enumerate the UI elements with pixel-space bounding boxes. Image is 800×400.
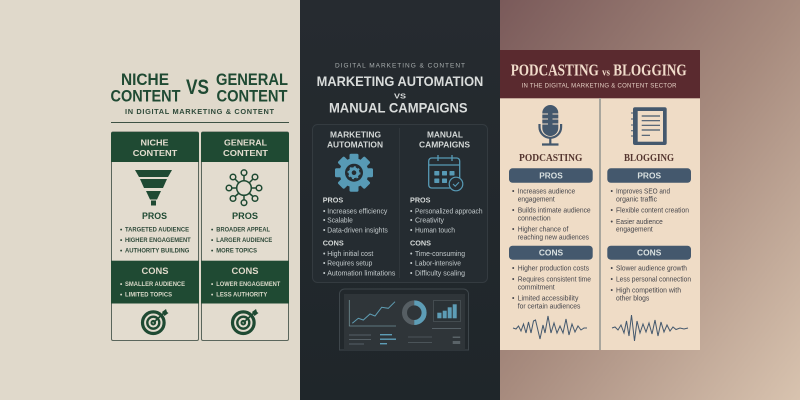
pros list: engagement <box>616 227 653 234</box>
pros list: Flexible content creation <box>616 208 689 215</box>
pros list: • <box>512 188 515 195</box>
pros <box>211 211 273 254</box>
waveform <box>513 316 587 339</box>
pros list: Builds intimate audience <box>518 208 591 215</box>
cons list: • <box>610 266 614 273</box>
title: niche vs general content: CONTENT <box>216 87 288 106</box>
header band <box>500 50 700 98</box>
icon: target <box>232 309 258 334</box>
icon: target <box>142 309 168 334</box>
pros label: PROS <box>539 172 563 180</box>
pros list: • <box>512 208 515 215</box>
cons list: other blogs <box>616 296 650 303</box>
cons: • <box>211 291 214 298</box>
column heading: PODCASTING <box>519 152 583 164</box>
cons list <box>610 266 691 303</box>
table placeholder lines <box>349 328 461 344</box>
pros: • <box>323 218 326 225</box>
cons: Time-consuming <box>415 251 465 258</box>
title: niche vs general content: CONTENT <box>110 87 181 106</box>
pros list: reaching new audiences <box>518 234 589 242</box>
cons label <box>607 246 691 260</box>
pros list <box>512 188 591 242</box>
pros list <box>610 188 689 234</box>
column: general content <box>201 132 289 340</box>
cons label: CONS <box>637 249 662 258</box>
cons: CONS <box>142 266 168 276</box>
column: podcasting <box>509 105 593 339</box>
cons label <box>509 246 593 260</box>
cons list: Less personal connection <box>616 277 691 284</box>
pros list: Improves SEO and <box>616 188 670 195</box>
card body <box>500 98 700 350</box>
title: VS <box>394 91 406 100</box>
cons: SMALLER AUDIENCE <box>125 281 186 288</box>
pros list: organic traffic <box>616 197 657 204</box>
pros list: Increases audience <box>518 188 575 195</box>
cons <box>111 261 199 304</box>
pros list: connection <box>518 216 551 223</box>
pros list: Higher chance of <box>518 227 568 234</box>
cons list: • <box>512 277 515 284</box>
pros: MORE TOPICS <box>216 247 258 254</box>
column: niche content <box>111 132 199 340</box>
pros label: PROS <box>637 172 662 180</box>
cons: • <box>323 271 326 278</box>
pros: • <box>120 227 123 234</box>
pros list: • <box>512 227 515 234</box>
cons list: Slower audience growth <box>616 266 687 273</box>
pros: PROS <box>232 211 258 221</box>
pros: Scalable <box>327 218 353 225</box>
title: MARKETING AUTOMATION <box>317 73 483 89</box>
column header: CONTENT <box>133 149 177 158</box>
column heading: AUTOMATION <box>327 140 383 150</box>
column header: GENERAL <box>224 139 267 148</box>
icon: microphone <box>540 105 561 144</box>
cons list: Limited accessibility <box>518 296 579 303</box>
pros <box>120 211 191 254</box>
pros label <box>509 168 593 183</box>
column header: CONTENT <box>223 149 268 158</box>
pros: • <box>211 227 214 234</box>
pros: Creativity <box>415 218 444 225</box>
column heading: MANUAL <box>427 130 463 140</box>
title: MANUAL CAMPAIGNS <box>329 99 468 115</box>
column heading <box>327 130 383 150</box>
cons: CONS <box>232 266 258 276</box>
pros list: • <box>610 208 614 215</box>
panel: podcasting vs blogging <box>500 0 800 400</box>
column header: NICHE <box>140 139 169 148</box>
pros: • <box>410 208 413 215</box>
column: manual campaigns <box>410 130 483 278</box>
pros: • <box>120 247 123 254</box>
cons: • <box>323 251 326 258</box>
column: blogging <box>607 107 691 341</box>
cons <box>323 239 396 278</box>
title: PODCASTING vs BLOGGING <box>511 61 687 80</box>
cons: LIMITED TOPICS <box>125 291 173 298</box>
pros: • <box>410 228 413 235</box>
panel: marketing automation vs manual campaigns <box>300 0 500 400</box>
subtitle: IN THE DIGITAL MARKETING & CONTENT SECTOR <box>522 84 677 90</box>
column heading: BLOGGING <box>624 152 674 164</box>
pros: • <box>211 237 214 244</box>
cons: LESS AUTHORITY <box>216 291 268 298</box>
bar chart <box>434 300 460 322</box>
title <box>317 73 483 115</box>
icon: network hub <box>226 170 262 206</box>
icon: gear <box>335 154 373 192</box>
cons: CONS <box>323 239 344 248</box>
column header <box>111 132 199 162</box>
cons: Labor-intensive <box>415 261 461 268</box>
title: niche vs general content: VS <box>186 76 209 99</box>
pros: Data-driven insights <box>327 228 388 235</box>
pros label <box>607 168 691 183</box>
cons list: Requires consistent time <box>518 277 591 284</box>
column heading <box>419 130 470 150</box>
column heading: CAMPAIGNS <box>419 140 470 150</box>
pros: PROS <box>323 196 343 205</box>
cons <box>410 239 465 278</box>
cons: • <box>120 281 123 288</box>
pros list: Easier audience <box>616 219 663 226</box>
cons list: • <box>512 296 515 303</box>
pros: PROS <box>410 196 430 205</box>
pros: • <box>120 237 123 244</box>
cons: LOWER ENGAGEMENT <box>216 281 280 288</box>
cons list: for certain audiences <box>518 304 581 311</box>
cons: High initial cost <box>327 251 373 258</box>
title: niche vs general content <box>110 70 288 106</box>
cons: • <box>410 271 413 278</box>
pros: • <box>323 208 326 215</box>
pros: TARGETED AUDIENCE <box>125 227 190 234</box>
cons list: commitment <box>518 285 555 292</box>
cons list: High competition with <box>616 288 681 295</box>
divider <box>599 98 601 350</box>
cons list: • <box>610 277 614 284</box>
pros: PROS <box>142 211 167 221</box>
pros: • <box>323 228 326 235</box>
title: niche vs general content: NICHE <box>121 70 169 89</box>
waveform <box>612 315 688 341</box>
eyebrow: DIGITAL MARKETING & CONTENT <box>335 62 465 69</box>
cons list: Higher production costs <box>518 266 589 273</box>
pros list: • <box>610 219 614 226</box>
pros <box>323 196 388 235</box>
pros <box>410 196 483 235</box>
cons: Difficulty scaling <box>415 271 465 278</box>
pros: • <box>211 247 214 254</box>
cons: • <box>120 291 123 298</box>
cons: • <box>410 261 413 268</box>
cons list: • <box>512 266 515 273</box>
cons: Automation limitations <box>327 271 396 278</box>
cons: • <box>211 281 214 288</box>
comparison card <box>312 124 488 282</box>
cons: Requires setup <box>327 261 372 268</box>
panel: niche vs general content <box>0 0 300 400</box>
subtitle: IN DIGITAL MARKETING & CONTENT <box>125 107 274 116</box>
pros list: engagement <box>518 197 555 204</box>
column header <box>201 132 289 162</box>
column heading: MARKETING <box>330 130 381 140</box>
cons list <box>512 266 591 311</box>
pros: HIGHER ENGAGEMENT <box>125 237 191 244</box>
pros: BROADER APPEAL <box>216 227 270 234</box>
cons list: • <box>610 288 614 295</box>
cons <box>201 261 289 304</box>
pros list: • <box>610 188 614 195</box>
title: niche vs general content: GENERAL <box>216 70 288 89</box>
pros: Personalized approach <box>415 208 483 215</box>
dashboard monitor illustration <box>340 289 468 350</box>
pros: Human touch <box>415 228 455 235</box>
cons: • <box>410 251 413 258</box>
line chart <box>349 300 396 326</box>
donut chart <box>404 303 424 323</box>
cons: • <box>323 261 326 268</box>
column: marketing automation <box>323 130 396 278</box>
icon: calendar with check <box>429 155 463 191</box>
pros: Increases efficiency <box>327 208 388 215</box>
pros: AUTHORITY BUILDING <box>125 247 189 254</box>
cons: CONS <box>410 239 431 248</box>
icon: funnel <box>135 170 172 206</box>
pros: • <box>410 218 413 225</box>
cons label: CONS <box>539 249 564 258</box>
pros: LARGER AUDIENCE <box>216 237 273 244</box>
icon: notebook <box>631 107 667 145</box>
